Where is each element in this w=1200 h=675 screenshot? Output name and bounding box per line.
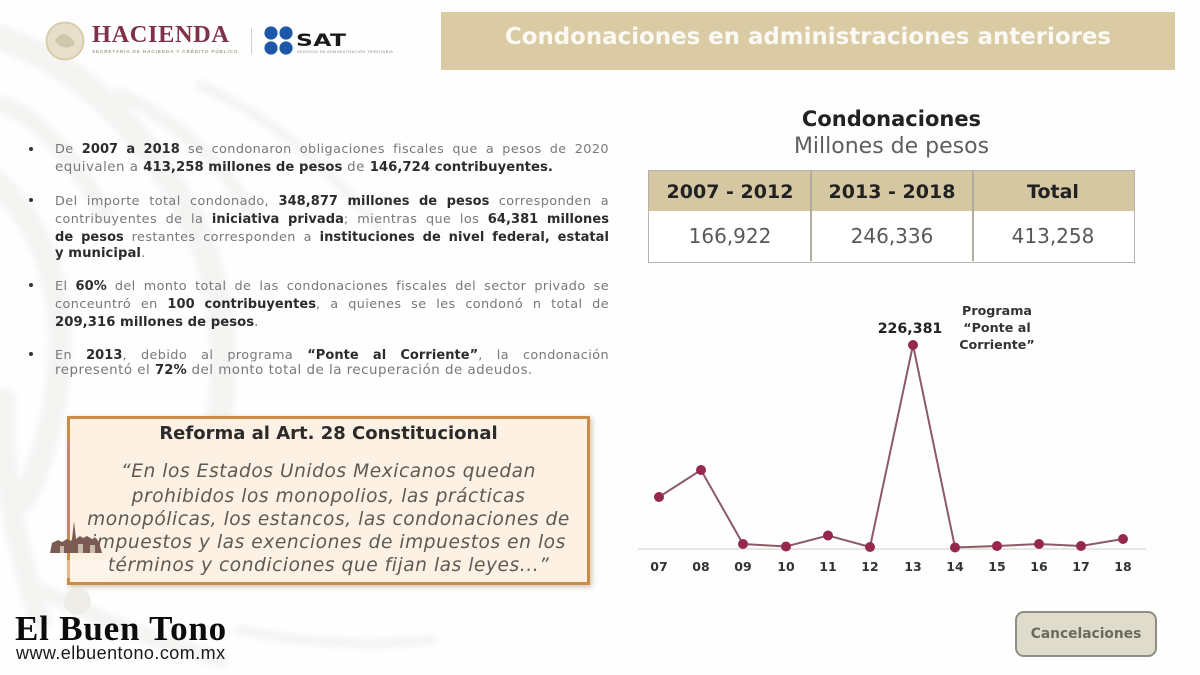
title: Condonaciones en administraciones anteriores	[505, 24, 1111, 50]
peak annotation: Corriente”	[959, 337, 1035, 352]
button: Cancelaciones: Cancelaciones	[1031, 626, 1141, 642]
header row: 2013 - 2018	[829, 181, 955, 203]
text block: key facts: de pesos restantes corresponden a instituciones de nivel federal, estatal	[55, 230, 609, 245]
logo: SAT	[251, 26, 393, 55]
text block: key facts: Del importe total condonado, 348,877 millones de pesos corresponden a	[55, 194, 609, 209]
table heading: Condonaciones	[802, 107, 981, 131]
wordmark: SAT	[296, 31, 346, 51]
agency name: SERVICIO DE ADMINISTRACIÓN TRIBUTARIA	[297, 50, 393, 54]
text block: key facts: equivalen a 413,258 millones de pesos de 146,724 contribuyentes.	[55, 160, 553, 175]
ministry name: SECRETARÍA DE HACIENDA Y CRÉDITO PÚBLICO	[92, 49, 238, 54]
text block: key facts: y municipal.	[55, 246, 146, 261]
callout quote: prohibidos los monopolios, las prácticas	[132, 486, 525, 507]
chart x-axis labels: 15	[988, 559, 1006, 574]
text block: key facts: En 2013, debido al programa “Ponte al Corriente”, la condonación	[55, 348, 609, 363]
header row: Total	[1027, 181, 1079, 203]
chart x-axis labels: 16	[1030, 559, 1048, 574]
chart x-axis labels: 11	[819, 559, 837, 574]
callout quote: “En los Estados Unidos Mexicanos quedan	[121, 461, 536, 482]
chart x-axis labels: 17	[1072, 559, 1090, 574]
icon: national seal	[46, 22, 84, 60]
value row: 246,336	[851, 224, 933, 248]
value row	[689, 224, 1094, 248]
text block: key facts: El 60% del monto total de las condonaciones fiscales del sector privado se	[55, 279, 609, 294]
chart x-axis labels: 10	[777, 559, 795, 574]
peak value: 226,381	[878, 321, 942, 337]
chart x-axis labels: 09	[734, 559, 752, 574]
logo: El Buen Tono	[15, 609, 227, 663]
table: totals by period	[648, 170, 1135, 263]
callout heading: Reforma al Art. 28 Constitucional	[159, 423, 498, 444]
button: Cancelaciones	[1015, 611, 1157, 657]
peak annotation: “Ponte al	[963, 320, 1031, 335]
text block: key facts: representó el 72% del monto total de la recuperación de adeudos.	[55, 363, 533, 378]
icon: blue dots	[264, 26, 293, 55]
text block: key facts: conceuntró en 100 contribuyentes, a quienes se les condonó n total de	[55, 297, 609, 312]
callout: Reforma al Art. 28	[67, 416, 590, 585]
value row: 413,258	[1012, 224, 1094, 248]
masthead: El Buen Tono	[15, 609, 227, 648]
title banner	[441, 12, 1175, 70]
data line	[659, 345, 1123, 548]
header row: 2007 - 2012	[667, 181, 793, 203]
callout quote: términos y condiciones que fijan las leyes...”	[108, 555, 549, 576]
icon: historic figures	[50, 521, 102, 553]
text block: key facts: 209,316 millones de pesos.	[55, 315, 259, 330]
value row: 166,922	[689, 224, 771, 248]
callout quote	[87, 461, 570, 576]
icon: faint seal	[64, 588, 91, 615]
wordmark: HACIENDA	[92, 21, 230, 48]
peak annotation	[959, 303, 1035, 352]
text block: key facts	[29, 142, 609, 378]
line chart: condonaciones by year	[638, 303, 1146, 552]
chart x-axis labels: 14	[946, 559, 964, 574]
faded caption under figures	[55, 560, 110, 578]
table subheading: Millones de pesos	[794, 134, 989, 159]
callout quote: impuestos y las exenciones de impuestos en los	[91, 532, 566, 553]
header row	[649, 171, 1134, 211]
text block: key facts: contribuyentes de la iniciativa privada; mientras que los 64,381 millones	[55, 212, 609, 227]
chart x-axis labels	[650, 559, 1132, 574]
chart x-axis labels: 12	[861, 559, 879, 574]
website: www.elbuentono.com.mx	[16, 643, 226, 663]
chart x-axis labels: 08	[692, 559, 710, 574]
chart x-axis labels: 07	[650, 559, 668, 574]
data points	[654, 340, 1128, 552]
callout quote: monopólicas, los estancos, las condonaciones de	[87, 509, 570, 530]
chart x-axis labels: 18	[1114, 559, 1132, 574]
chart x-axis labels: 13	[904, 559, 922, 574]
peak annotation: Programa	[962, 303, 1032, 318]
text block: key facts: De 2007 a 2018 se condonaron obligaciones fiscales que a pesos de 2020	[55, 142, 609, 157]
logo: Hacienda	[46, 21, 238, 60]
divider	[251, 28, 252, 54]
